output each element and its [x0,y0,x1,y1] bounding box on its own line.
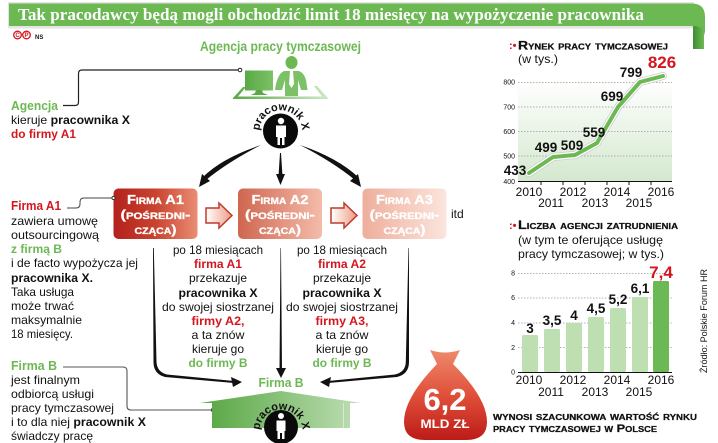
text block: column A1 to A2: do firmy B [188,356,248,370]
line chart: rynek pracy: 559 [583,125,605,140]
heading: liczba agencji: :• [509,220,517,232]
copyright marks: C [15,33,20,39]
bar chart: liczba agencji: 2013 [582,385,609,399]
bar chart: liczba agencji: 0 [511,370,515,376]
text block: firma B: pracy tymczasowej [11,401,114,415]
arrow: to firma A2 [276,153,285,185]
box: firma A2: Firma A2 [252,192,308,207]
icon: money bag with value [404,350,487,440]
callout line: agencja [63,68,242,106]
text block: column A1 to A2: kieruje go [192,342,244,356]
arrow: A2 to A3 [331,203,357,228]
arrow: A1 to A2 [206,203,232,228]
text block: firma B: jest finalnym [10,373,80,387]
text block: column A2 to A3: firmy A3, [316,314,368,328]
text block: firma A1: maksymalnie [11,313,82,327]
line chart: rynek pracy: 500 [503,154,515,160]
bar chart: liczba agencji: 2012 [560,373,587,387]
text block: agencja [11,99,130,141]
source note: Źródło: Polskie Forum HR [699,269,710,373]
bar chart: liczba agencji: 2014 [604,373,631,387]
caption: market value: pracy tymczasowej w Polsce [493,423,658,435]
bar chart: liczba agencji: 2016 [648,373,675,387]
icon: money bag with value: 6,2 [423,382,467,417]
line chart: rynek pracy: 699 [601,89,623,104]
text block: firma A1: zawiera umowę [11,214,98,228]
bar chart: liczba agencji: 4 [511,320,515,327]
line chart: rynek pracy: 2013 [582,196,609,210]
line chart: rynek pracy: 2010 [516,185,543,199]
text block: column A1 to A2: do swojej siostrzanej [162,300,274,314]
box: firma A1: (pośredni- [120,207,190,222]
line chart: rynek pracy [503,53,676,210]
text block: firma A1: może trwać [11,299,74,313]
icon: firma B building with pracownik X [200,391,360,443]
copyright marks: NS [35,35,43,41]
line chart: rynek pracy: 2012 [560,185,587,199]
text block: column A1 to A2: pracownika X [178,286,258,300]
caption: market value [493,411,697,435]
text block: firma A1: z firmą B [11,242,62,256]
bar chart: liczba agencji [511,263,675,399]
text block: firma B: i to dla niej pracownik X [11,415,146,429]
bar chart: liczba agencji: 4,5 [587,301,606,316]
line chart: rynek pracy: 600 [503,129,515,136]
line chart: rynek pracy: 433 [504,163,527,178]
text block: column A2 to A3: do swojej siostrzanej [286,300,398,314]
icon: agency desk with worker [233,56,328,99]
text block: column A1 to A2: firmy A2, [192,314,244,328]
box: firma A2: cząca) [259,222,301,237]
bar chart: liczba agencji: 6,1 [631,281,650,296]
line chart: rynek pracy: 700 [503,104,515,112]
text block: column A2 to A3: a ta znów [316,328,369,342]
box: firma A2 [238,188,322,239]
line chart: rynek pracy: 2011 [538,196,564,210]
text block: firma A1: pracownika X. [11,271,93,285]
line chart: rynek pracy: 799 [620,65,642,80]
text block: firma B: świadczy pracę [11,429,93,443]
text block: column A2 to A3: firma A2 [318,257,366,271]
bar chart: liczba agencji: 7,4 [649,263,673,282]
text block: agencja: Agencja [11,99,59,113]
text block: column A2 to A3: pracownika X [302,286,382,300]
text block: firma B [10,359,146,443]
line chart: rynek pracy: 499 [535,140,557,155]
line chart: rynek pracy: 2016 [648,185,675,199]
arrow: middle line to firma B [276,248,286,378]
text block: column A2 to A3 [286,243,398,370]
box: firma A1: cząca) [134,222,176,237]
line chart: rynek pracy: 800 [503,80,515,86]
text block: agencja: kieruje pracownika X [11,113,130,127]
heading: liczba agencji [509,218,678,261]
text block: firma A1: i de facto wypożycza jej [11,256,138,270]
icon: pracownik X top [254,104,310,148]
box: firma A3: Firma A3 [376,192,433,207]
text block: firma A1: outsourcingową [11,228,99,242]
bar chart: liczba agencji: 4 [570,308,578,323]
box: firma A1 [114,188,198,239]
box: firma A3 [362,188,446,239]
line chart: rynek pracy: 826 [648,53,676,72]
bar chart: liczba agencji: 8 [511,270,515,278]
heading: rynek pracy tymczasowej [509,38,668,66]
text block: firma A1 [11,199,138,341]
bar chart: liczba agencji: 2011 [538,385,564,399]
caption: market value: wynosi szacunkowa wartość rynku [493,411,697,423]
box: firma A1: Firma A1 [127,192,184,207]
heading: liczba agencji: pracy tymczasowej; w tys.) [518,247,664,261]
arrow: to firma A1 [199,145,261,187]
arrow: left line to firma B [153,248,242,387]
heading: rynek pracy tymczasowej: (w tys.) [518,52,558,66]
title banner [8,2,705,49]
callout line: firma A1 [67,196,115,208]
bar chart: liczba agencji: 2 [511,345,515,352]
text block: column A2 to A3: do firmy B [312,356,372,370]
heading: agencja pracy tymczasowej: Agencja pracy tymczasowej [200,39,361,54]
line chart: rynek pracy: 2014 [604,185,631,199]
copyright marks: P [24,33,29,39]
text block: column A2 to A3: przekazuje [313,271,371,285]
text block: column A1 to A2: przekazuje [189,271,247,285]
heading: liczba agencji: (w tym te oferujące usługę [518,233,663,247]
text block: firma A1: Taka usługa [11,285,74,299]
text block: agencja: do firmy A1 [11,127,76,141]
bar chart: liczba agencji: 3,5 [543,313,562,328]
box: firma A3: cząca) [384,222,426,237]
text block: firma B: Firma B [11,359,57,373]
line chart: rynek pracy: 400 [503,179,515,186]
title banner: Tak pracodawcy będą mogli obchodzić limit 18 miesięcy na wypożyczenie pracownika [18,5,644,24]
text block: firma A1: Firma A1 [11,199,61,213]
bar chart: liczba agencji: 5,2 [609,292,627,307]
arrow: to firma A3 [300,145,361,187]
icon: firma B building with pracownik X: pracownik X [254,404,310,430]
text block: column A2 to A3: po 18 miesiącach [297,243,387,257]
callout line: firma B [63,367,215,412]
heading: liczba agencji: Liczba agencji zatrudnienia [518,218,678,232]
text block: firma A1: 18 miesięcy. [11,327,73,341]
text block: column A1 to A2: a ta znów [192,328,245,342]
copyright marks [14,31,43,41]
heading: rynek pracy tymczasowej: Rynek pracy tymczasowej [518,38,668,52]
bar chart: liczba agencji: 2015 [626,385,653,399]
label: firma B: Firma B [258,375,304,390]
text block: column A1 to A2: firma A1 [194,257,242,271]
bar chart: liczba agencji: 6 [511,295,515,302]
box: firma A3: (pośredni- [370,207,440,222]
text block: column A2 to A3: kieruje go [316,342,368,356]
bar chart: liczba agencji: 3 [526,321,534,336]
text: itd: itd [451,207,464,221]
line chart: rynek pracy: 509 [561,138,583,153]
box: firma A2: (pośredni- [245,207,315,222]
bar chart: liczba agencji: 2010 [516,373,543,387]
text block: firma B: odbiorcą usługi [11,387,94,401]
icon: pracownik X top: pracownik X [254,104,310,130]
text block: column A1 to A2: po 18 miesiącach [173,243,263,257]
heading: rynek pracy tymczasowej: :• [509,40,517,52]
text block: column A1 to A2 [162,243,274,370]
line chart: rynek pracy: 2015 [626,196,653,210]
arrow: right line to firma B [320,248,409,387]
icon: money bag with value: MLD ZŁ [420,417,470,431]
